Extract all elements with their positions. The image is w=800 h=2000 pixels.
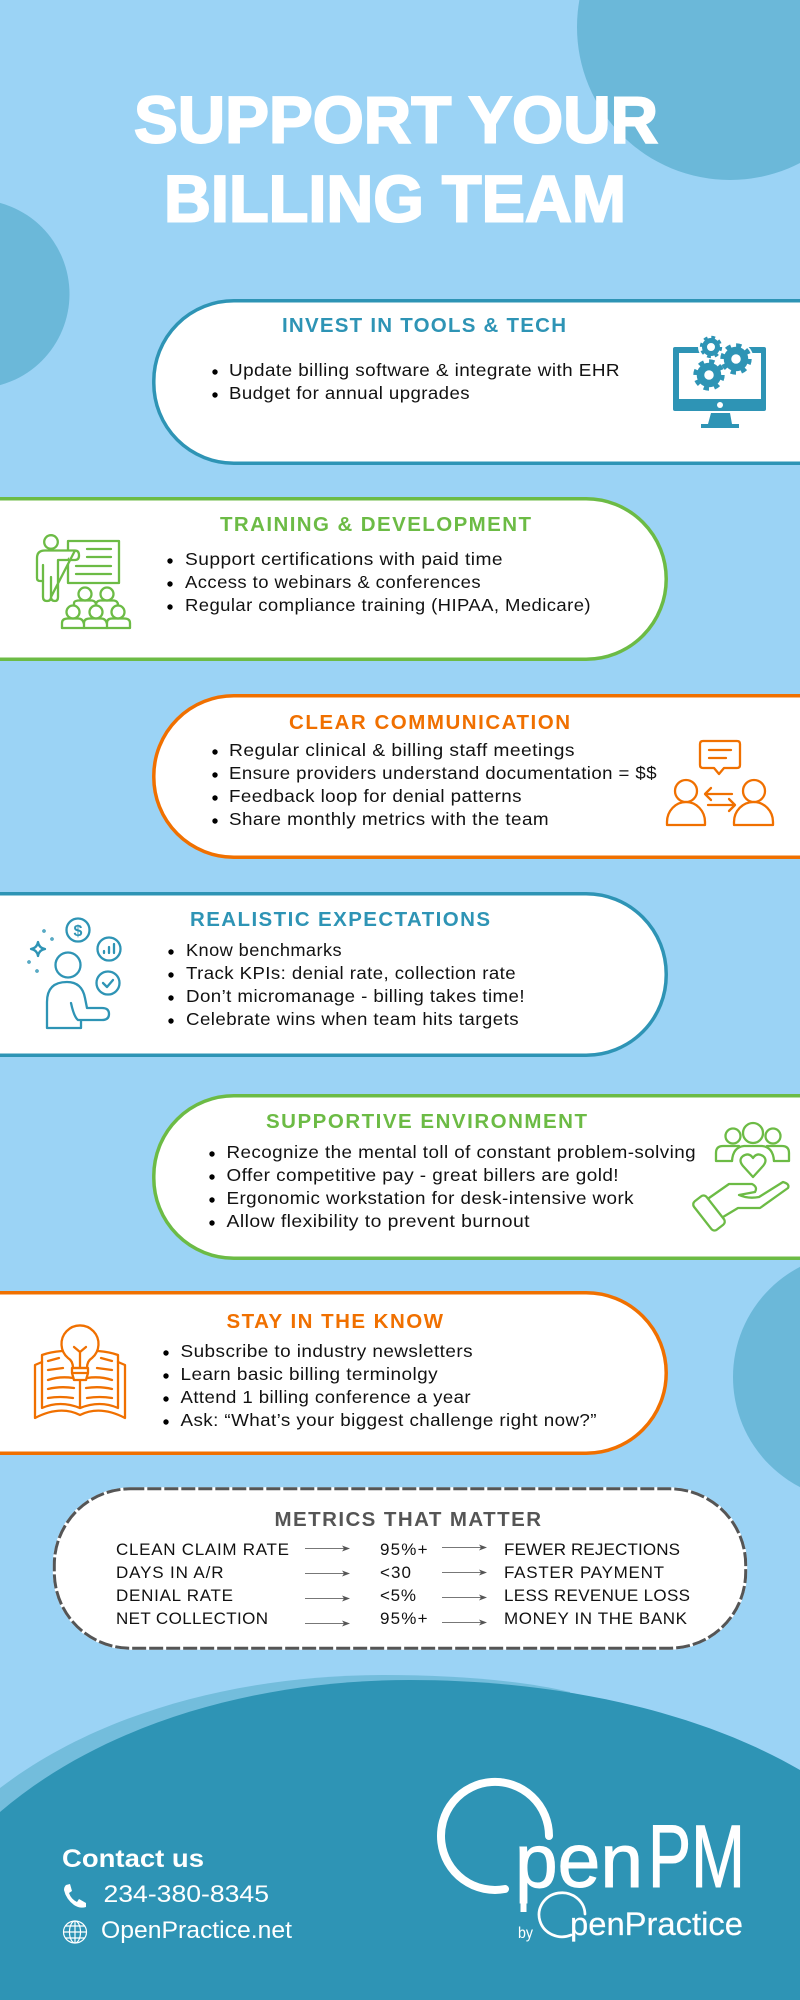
metric targets: 95%+	[380, 1609, 428, 1628]
title	[134, 82, 658, 236]
logo: OpenPM by OpenPractice: PM	[648, 1806, 745, 1906]
heading: invest in tools and tech: INVEST IN TOOLS & TECH	[282, 314, 566, 337]
list: communication bullets: Feedback loop for denial patterns	[229, 786, 522, 806]
heading: realistic expectations: REALISTIC EXPECTATIONS	[190, 908, 490, 931]
heading: metrics that matter: METRICS THAT MATTER	[274, 1508, 541, 1531]
icon: person with metrics	[28, 918, 120, 1028]
metric labels: CLEAN CLAIM RATE	[116, 1540, 289, 1559]
list: tools bullets	[212, 360, 620, 403]
list: stay in the know bullets: Attend 1 billing conference a year	[180, 1387, 471, 1407]
metric targets: 95%+	[380, 1540, 428, 1559]
arrows: target to outcome	[442, 1544, 487, 1626]
heading: stay in the know: STAY IN THE KNOW	[226, 1310, 444, 1333]
panel: metrics that matter	[54, 1489, 746, 1648]
list: environment bullets: Allow flexibility to prevent burnout	[226, 1211, 530, 1231]
arrows: metric to target	[305, 1546, 350, 1626]
footer band	[0, 1675, 800, 2000]
list: expectations bullets: Know benchmarks	[186, 940, 342, 960]
list: training bullets: Regular compliance training (HIPAA, Medicare)	[185, 595, 591, 615]
list: environment bullets: Recognize the mental toll of constant problem-solving	[226, 1142, 696, 1162]
heading: clear communication: CLEAR COMMUNICATION	[289, 711, 570, 734]
panel: realistic expectations	[0, 894, 666, 1055]
logo: OpenPM by OpenPractice: penPractice	[570, 1906, 743, 1942]
icon: monitor with gears	[673, 334, 766, 428]
list: training bullets: Support certifications with paid time	[185, 549, 503, 569]
panel: clear communication	[154, 696, 800, 857]
icon: phone	[64, 1884, 86, 1908]
panel: invest in tools and tech	[154, 301, 800, 463]
panel: stay in the know	[0, 1293, 666, 1453]
list: stay in the know bullets: Subscribe to industry newsletters	[180, 1341, 473, 1361]
metric targets: <30	[380, 1563, 411, 1582]
icon: two people talking	[667, 741, 773, 825]
icon: open book with light bulb	[35, 1325, 125, 1418]
metric labels: DENIAL RATE	[116, 1586, 233, 1605]
panel: training and development	[0, 499, 666, 659]
metric outcomes: FEWER REJECTIONS	[504, 1540, 680, 1559]
contact heading: Contact us	[62, 1845, 204, 1873]
metric labels: DAYS IN A/R	[116, 1563, 224, 1582]
title: SUPPORT YOUR	[134, 82, 658, 156]
list: expectations bullets: Celebrate wins when team hits targets	[186, 1009, 519, 1029]
list: tools bullets: Budget for annual upgrades	[229, 383, 470, 403]
heading: supportive environment: SUPPORTIVE ENVIRONMENT	[266, 1110, 587, 1133]
list: tools bullets: Update billing software & integrate with EHR	[229, 360, 620, 380]
metric outcomes: MONEY IN THE BANK	[504, 1609, 688, 1628]
phone number: 234-380-8345	[104, 1881, 269, 1908]
metric outcomes: LESS REVENUE LOSS	[504, 1586, 690, 1605]
list: stay in the know bullets: Ask: “What’s your biggest challenge right now?”	[180, 1410, 597, 1430]
list: stay in the know bullets: Learn basic billing terminolgy	[180, 1364, 438, 1384]
logo: OpenPM by OpenPractice	[441, 1782, 745, 1942]
metric targets	[380, 1540, 428, 1628]
heading: training and development: TRAINING & DEVELOPMENT	[220, 513, 531, 536]
list: expectations bullets: Don’t micromanage - billing takes time!	[186, 986, 525, 1006]
list: training bullets	[167, 549, 591, 615]
list: communication bullets	[212, 740, 657, 829]
panel: supportive environment	[154, 1096, 800, 1258]
list: communication bullets: Share monthly metrics with the team	[229, 809, 549, 829]
list: environment bullets: Ergonomic workstation for desk-intensive work	[226, 1188, 634, 1208]
metric outcomes	[504, 1540, 690, 1628]
logo: OpenPM by OpenPractice: pen	[515, 1819, 643, 1904]
list: stay in the know bullets	[163, 1341, 597, 1430]
list: environment bullets: Offer competitive pay - great billers are gold!	[226, 1165, 619, 1185]
list: communication bullets: Ensure providers understand documentation = $$	[229, 763, 657, 783]
metric labels: NET COLLECTION	[116, 1609, 268, 1628]
icon: globe	[64, 1921, 86, 1943]
list: communication bullets: Regular clinical & billing staff meetings	[229, 740, 575, 760]
logo: OpenPM by OpenPractice: by	[518, 1925, 533, 1942]
metric outcomes: FASTER PAYMENT	[504, 1563, 664, 1582]
icon: person with metrics: $	[74, 923, 83, 940]
list: training bullets: Access to webinars & conferences	[185, 572, 481, 592]
list: expectations bullets	[168, 940, 525, 1029]
title: BILLING TEAM	[164, 162, 626, 236]
icon: hand holding people and heart	[692, 1123, 789, 1232]
list: environment bullets	[209, 1142, 696, 1231]
list: expectations bullets: Track KPIs: denial rate, collection rate	[186, 963, 516, 983]
website: OpenPractice.net	[101, 1917, 292, 1944]
metric targets: <5%	[380, 1586, 416, 1605]
metric labels	[116, 1540, 289, 1628]
icon: presenter and audience	[37, 535, 130, 628]
contact details	[62, 1845, 292, 1944]
